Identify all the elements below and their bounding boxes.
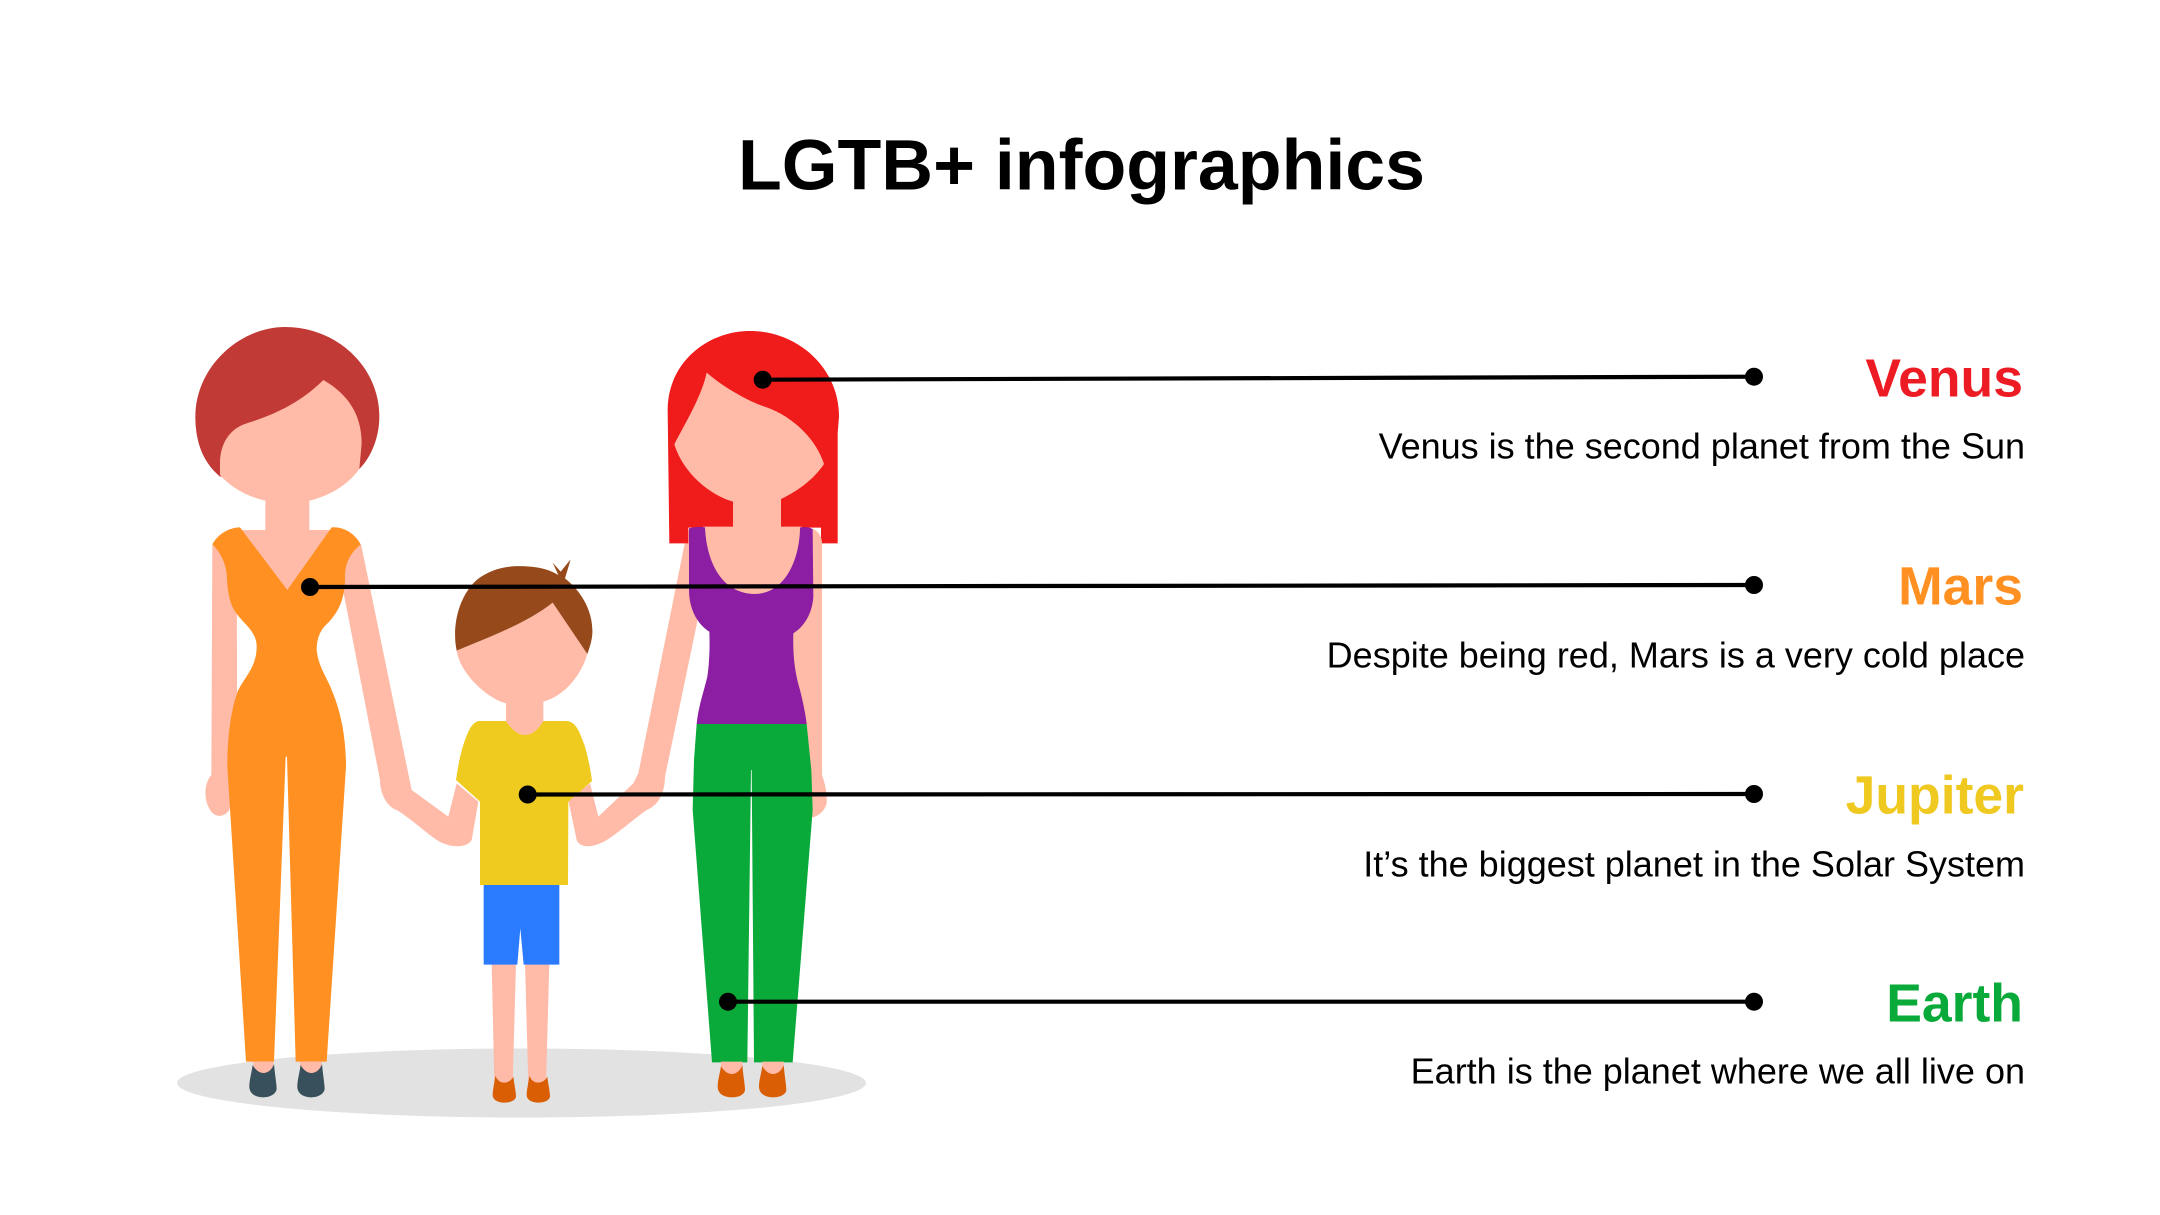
connector: Mars xyxy=(301,576,1763,596)
text block: Venus xyxy=(1379,350,2025,466)
text block: Mars xyxy=(1327,558,2025,676)
text block: Venus: Venus is the second planet from the Sun xyxy=(1379,426,2025,466)
text block: Mars: Mars xyxy=(1898,558,2023,616)
child: lower body xyxy=(484,885,559,1103)
connector: Earth xyxy=(719,993,1763,1011)
child: face and neck xyxy=(457,603,587,738)
text block: Jupiter: It’s the biggest planet in the Solar System xyxy=(1363,844,2025,884)
arm: woman and child holding hands, right xyxy=(568,527,700,846)
text block: Earth: Earth is the planet where we all live on xyxy=(1411,1050,2025,1092)
text block: Jupiter: Jupiter xyxy=(1846,766,2024,826)
woman in purple: right arm and hand xyxy=(787,529,827,817)
illustration: family xyxy=(195,327,839,1103)
child: blue shorts xyxy=(484,885,559,965)
arm: woman and child holding hands, left xyxy=(337,544,478,846)
connector: Venus xyxy=(754,368,1763,389)
text block: Earth: Earth xyxy=(1886,974,2023,1034)
woman in orange: feet and shoes xyxy=(249,1062,325,1097)
child: shoes xyxy=(493,1076,550,1103)
woman in orange: jumpsuit xyxy=(212,527,361,1062)
woman in orange: face and neck xyxy=(220,380,362,593)
woman in purple: purple top xyxy=(689,527,813,724)
child: hair xyxy=(455,559,592,654)
woman in purple: face and neck xyxy=(674,373,824,530)
figure: woman in orange xyxy=(195,327,379,1097)
connector: Jupiter xyxy=(519,785,1763,804)
ground shadow xyxy=(177,1048,866,1118)
woman in purple: green trousers xyxy=(693,724,813,1062)
woman in purple: feet and shoes xyxy=(718,1062,786,1097)
figure: woman in purple and green xyxy=(668,331,839,1062)
text block: Venus: Venus xyxy=(1865,350,2023,408)
woman in orange: hair xyxy=(195,327,379,477)
child: yellow shirt xyxy=(456,721,592,885)
title: LGTB+ infographics xyxy=(738,126,1425,206)
child: legs xyxy=(492,963,549,1084)
figure: child xyxy=(455,559,592,885)
text block: Earth xyxy=(1411,974,2025,1092)
text block: Jupiter xyxy=(1363,766,2025,884)
text block: Mars: Despite being red, Mars is a very cold place xyxy=(1327,634,2025,676)
woman in orange: left arm xyxy=(205,544,237,816)
woman in purple: chest xyxy=(703,527,802,597)
woman in purple: hair xyxy=(668,331,839,543)
